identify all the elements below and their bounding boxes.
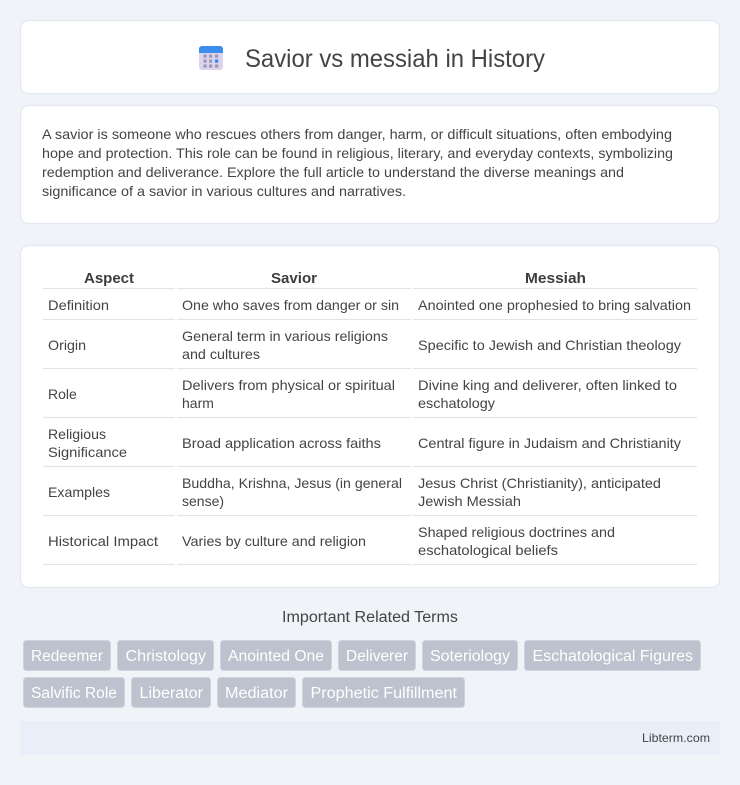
row: role xyxy=(48,377,677,411)
tag: Eschatological Figures xyxy=(524,640,700,670)
row: role: Delivers from physical or spiritual xyxy=(182,377,395,393)
text block: introduction: significance of a savior in various cultures and narratives. xyxy=(42,183,406,199)
row: historical impact: Varies by culture and religion xyxy=(182,533,366,549)
tag: Soteriology xyxy=(422,640,518,670)
icon: calendar xyxy=(199,46,223,70)
tag: Deliverer: Deliverer xyxy=(346,648,408,665)
title: Savior vs messiah in History xyxy=(245,45,545,73)
tag: Anointed One: Anointed One xyxy=(228,648,324,665)
row: role: Divine king and deliverer, often linked to xyxy=(418,377,677,393)
tag: Prophetic Fulfillment xyxy=(302,678,464,708)
row: origin: Origin xyxy=(48,337,86,353)
tag: Christology: Christology xyxy=(126,648,206,665)
tag: Soteriology: Soteriology xyxy=(430,648,510,665)
row: origin xyxy=(48,328,681,362)
row: examples xyxy=(48,475,661,509)
row: origin: Specific to Jewish and Christian theology xyxy=(418,337,681,353)
tag: Redeemer xyxy=(24,640,110,670)
tag: Prophetic Fulfillment: Prophetic Fulfillment xyxy=(310,685,458,702)
footer xyxy=(20,721,720,755)
row: definition: Anointed one prophesied to bring salvation xyxy=(418,297,691,313)
tag: Liberator: Liberator xyxy=(140,685,203,702)
row: historical impact: eschatological beliefs xyxy=(418,542,558,558)
row: examples: Jewish Messiah xyxy=(418,493,521,509)
table header: Savior xyxy=(271,270,317,287)
table header xyxy=(84,270,586,287)
row: religious significance: Significance xyxy=(48,444,127,460)
text block: introduction: redemption and deliverance. Explore the full article to understand the diverse meanings and xyxy=(42,164,624,180)
row: origin: and cultures xyxy=(182,346,260,362)
tag: Salvific Role xyxy=(24,678,124,708)
heading: important related terms: Important Related Terms xyxy=(282,609,458,626)
row: religious significance xyxy=(48,426,681,460)
row: role: harm xyxy=(182,395,214,411)
tag: Liberator xyxy=(132,678,210,708)
panel: introduction xyxy=(20,106,720,224)
row: examples: sense) xyxy=(182,493,224,509)
tags: related terms xyxy=(24,640,700,708)
row: historical impact xyxy=(48,524,615,558)
table header: Aspect xyxy=(84,270,134,287)
row: role: eschatology xyxy=(418,395,495,411)
text block: introduction: hope and protection. This role can be found in religious, literary, and everyday contexts, symbolizing xyxy=(42,145,673,161)
tag: Mediator: Mediator xyxy=(225,685,288,702)
footer: Libterm.com xyxy=(642,731,710,745)
tag: Anointed One xyxy=(220,640,332,670)
row: examples: Jesus Christ (Christianity), anticipated xyxy=(418,475,661,491)
tag: Christology xyxy=(118,640,214,670)
panel: header xyxy=(20,20,720,94)
table header: Messiah xyxy=(525,270,586,287)
tag: Deliverer xyxy=(338,640,416,670)
tag: Mediator xyxy=(218,678,296,708)
tag: Eschatological Figures: Eschatological Figures xyxy=(532,648,693,665)
text block: introduction xyxy=(42,126,673,199)
row: examples: Examples xyxy=(48,484,110,500)
row: definition xyxy=(48,297,691,313)
row: examples: Buddha, Krishna, Jesus (in general xyxy=(182,475,402,491)
row: religious significance: Religious xyxy=(48,426,106,442)
text block: introduction: A savior is someone who rescues others from danger, harm, or difficult situations, often embodying xyxy=(42,126,672,142)
tag: Salvific Role: Salvific Role xyxy=(31,685,117,702)
row: historical impact: Shaped religious doctrines and xyxy=(418,524,615,540)
row: historical impact: Historical Impact xyxy=(48,533,158,549)
row: definition: One who saves from danger or sin xyxy=(182,297,399,313)
row: role: Role xyxy=(48,386,77,402)
panel: comparison table xyxy=(20,246,720,588)
row: religious significance: Central figure in Judaism and Christianity xyxy=(418,435,681,451)
row: definition: Definition xyxy=(48,297,109,313)
row: religious significance: Broad application across faiths xyxy=(182,435,381,451)
row: origin: General term in various religions xyxy=(182,328,388,344)
tag: Redeemer: Redeemer xyxy=(31,648,103,665)
